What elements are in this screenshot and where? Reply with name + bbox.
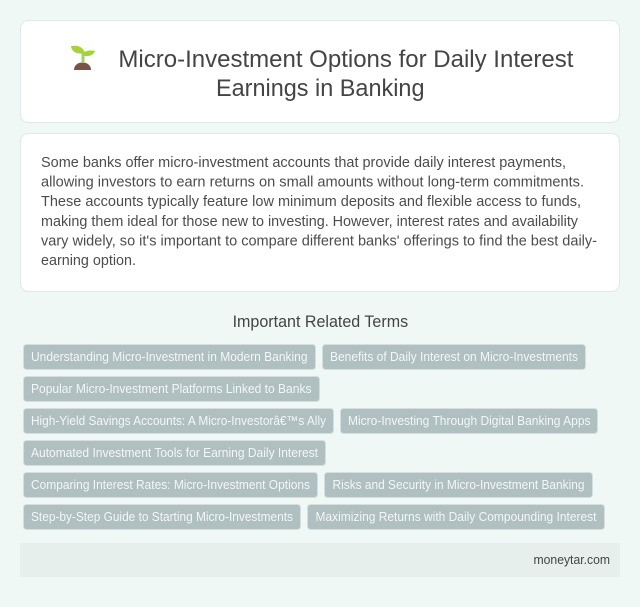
tag: guide: Step-by-Step Guide to Starting Micro-Investments	[31, 510, 293, 524]
tag: comparing: Comparing Interest Rates: Micro-Investment Options	[31, 478, 310, 492]
title	[118, 46, 574, 102]
title: Micro-Investment Options for Daily Interest	[118, 46, 574, 73]
text block: description	[41, 155, 597, 269]
tag: risks: Risks and Security in Micro-Investment Banking	[332, 478, 584, 492]
tag: comparing	[24, 472, 318, 498]
tag: savings	[24, 408, 334, 434]
footer	[20, 543, 620, 577]
tag: automated	[24, 440, 326, 466]
tag: benefits	[322, 344, 586, 370]
tag: apps: Micro-Investing Through Digital Banking Apps	[348, 414, 590, 428]
tag: maximizing: Maximizing Returns with Daily Compounding Interest	[316, 510, 597, 524]
tag: maximizing	[308, 504, 604, 530]
tag: savings: High-Yield Savings Accounts: A Micro-Investorâ€™s Ally	[31, 414, 327, 428]
heading: related terms: Important Related Terms	[233, 313, 408, 331]
text block: description: earning option.	[41, 253, 136, 269]
tag: apps	[340, 408, 598, 434]
tag: guide	[24, 504, 300, 530]
text block: description: These accounts typically feature low minimum deposits and flexible access to funds,	[41, 194, 581, 210]
tag: automated: Automated Investment Tools for Earning Daily Interest	[31, 446, 318, 460]
icon: seedling	[71, 46, 95, 70]
text block: description: Some banks offer micro-investment accounts that provide daily interest payments,	[41, 155, 566, 171]
text block: description: making them ideal for those new to investing. However, interest rates and availability	[41, 214, 579, 230]
tag: platforms	[24, 376, 320, 402]
panel: header	[20, 20, 620, 122]
tag: understanding	[24, 344, 316, 370]
panel: description	[20, 134, 620, 292]
tag: benefits: Benefits of Daily Interest on Micro-Investments	[330, 350, 578, 364]
tag: understanding: Understanding Micro-Investment in Modern Banking	[31, 350, 308, 364]
footer: moneytar.com	[534, 552, 610, 567]
title: Earnings in Banking	[216, 75, 424, 102]
text block: description: vary widely, so it's important to compare different banks' offerings to find the best daily-	[41, 233, 597, 249]
tag: platforms: Popular Micro-Investment Platforms Linked to Banks	[31, 382, 312, 396]
tag: risks	[324, 472, 592, 498]
text block: description: allowing investors to earn returns on small amounts without long-term commitments.	[41, 175, 584, 191]
